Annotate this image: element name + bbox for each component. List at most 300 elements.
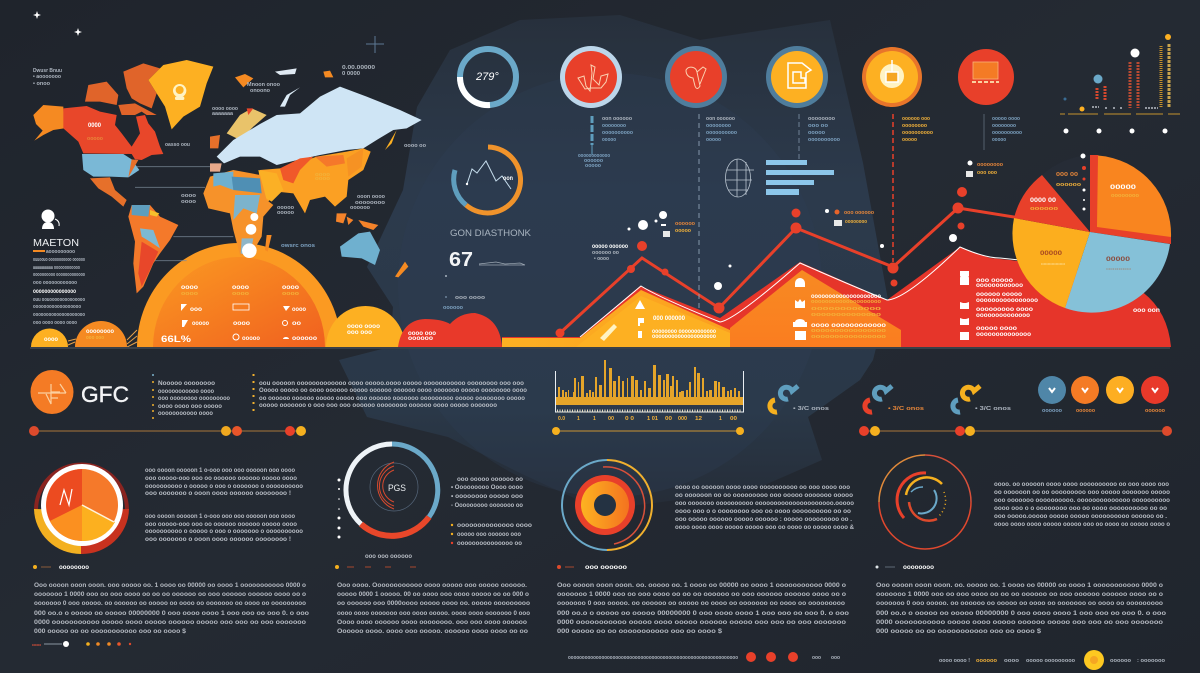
circle labels: ooooo <box>192 321 209 327</box>
text list B: • oooooooo ooooo ooo <box>451 494 523 500</box>
circle labels: ooo <box>190 307 202 313</box>
annotations near trend line: oooooo <box>675 221 695 227</box>
axis labels: 1 <box>577 416 580 422</box>
map labels: • aooooooo <box>33 74 61 80</box>
horizontal bars <box>766 160 834 195</box>
text block D: oo oooooon oo oo ooooooooo ooo ooooo ooooooo ooooo <box>994 490 1170 496</box>
paragraph column 3: 000 ooooo oo oo ooooooooooo ooo oo oooo $ <box>557 628 722 635</box>
footer right: oooo oooo ! <box>939 658 970 664</box>
timeline left <box>29 426 306 436</box>
left legend: ooo oooo oooo oooo <box>33 320 77 326</box>
text block A: ooo oooon ooooon 1 o-ooo ooo ooo ooooon ooo oooo <box>145 468 295 474</box>
area: orange hill <box>730 270 901 347</box>
circle labels: 66L% <box>161 334 191 344</box>
circle labels: oooooo <box>292 336 317 342</box>
header paragraph: Ooooo ooooo oo oooo oooooo ooooo oooooo oooooo oooo ooooooo ooooo oooooooo oooo <box>259 388 527 394</box>
text block C: oo oooooon oo oo ooooooooo ooo ooooo ooooooo ooooo <box>675 493 853 499</box>
chevron circles: oooooo <box>1076 408 1095 414</box>
slice: blue <box>1065 232 1170 313</box>
icon: Greenland marker <box>173 84 186 100</box>
map: South America <box>128 205 178 293</box>
connector lines <box>68 330 137 347</box>
chevron circles <box>1038 376 1169 414</box>
map: connector lines <box>135 167 233 261</box>
text block A: oooooooooo o ooooo o ooo o ooooooo o oooooooooo <box>145 484 303 490</box>
circle labels: oooo oooo <box>347 324 380 330</box>
text list B: oooooooooooooo oooo <box>457 523 532 529</box>
circle: small yellow <box>31 329 68 347</box>
background: central blue shape <box>339 15 888 510</box>
text block C: oooo oo ooooon oooo oooo oooooooooo oo ooo oooo ooo <box>675 485 850 491</box>
header logo: GFC <box>81 382 129 407</box>
paragraph column 3: ooooooo 1 0000 ooo oo ooo oooo oo oo oo oooooo oo ooo oooooo oooooo oooo oo o <box>557 591 846 598</box>
paragraph column 3: Ooo oooon ooon ooon. oo. ooooo oo. 1 oooo oo 00000 oo oooo 1 ooooooooooo 0000 o <box>557 582 846 589</box>
circle labels: oooo <box>181 291 198 297</box>
slice: orange <box>1097 156 1171 237</box>
left legend <box>33 238 85 326</box>
annotations near trend line: oooooo oo <box>592 250 619 256</box>
text block C <box>675 485 855 531</box>
footer middle <box>568 652 840 662</box>
annotations near trend line: • oooo <box>594 256 609 262</box>
slice: yellow <box>1012 218 1090 308</box>
globe icon <box>726 159 754 197</box>
map: United States <box>82 154 139 177</box>
map labels: aaaaaaa <box>212 111 233 117</box>
text block A: ooo ooooo-ooo ooo oo oooooo oooooo ooooo oooo <box>145 476 297 482</box>
top icon 6 <box>958 49 1014 105</box>
paragraph column 2: ooooo 0000 1 ooooo. 00 oo oooo ooo oooo ooooo oo oo 000 o <box>337 591 529 598</box>
top icon 4 <box>766 46 828 108</box>
paragraph column 1: 000 oo.o o ooooo oo ooooo 00000000 0 ooo oooo oooo 1 ooo ooo oo ooo 0. o ooo <box>34 610 309 617</box>
annotations near trend line: ooooo <box>675 228 691 234</box>
mountain text: oooooooooooooo <box>976 332 1031 338</box>
mountain text: oooo oooooooooooo <box>811 323 886 329</box>
circle labels: ooooo <box>242 336 260 342</box>
map: Greenland <box>148 60 213 129</box>
circle D: thin ring with arcs <box>879 455 971 549</box>
circle labels: oooo <box>181 285 198 291</box>
mountain text: oooooooooooooooooooo <box>811 299 881 305</box>
map labels: owsrc onos <box>281 243 315 249</box>
timeline right <box>859 426 1172 436</box>
map labels: 0.00.00000 <box>342 65 375 71</box>
map labels: 0000 <box>88 123 102 129</box>
footer right: oooo <box>1004 658 1019 664</box>
map labels: oooo <box>181 193 196 199</box>
map labels: oooo <box>315 176 330 182</box>
pie dots <box>1080 154 1086 210</box>
pie labels: oooooo <box>1030 206 1058 212</box>
text block C: ooo ooooooo oooooooooo ooooooooooooooooooooo.ooooo <box>675 501 854 507</box>
icon column texts: oooooooooo <box>902 130 933 136</box>
pie labels: 00000 <box>1040 251 1063 257</box>
left legend: aooooooooo <box>46 249 75 255</box>
mountain text: ooo oon <box>1133 308 1160 314</box>
map: Alaska <box>33 105 64 141</box>
circle: small orange <box>75 321 127 347</box>
paragraph column 4 <box>876 582 1166 635</box>
pie labels: oooooo <box>1056 182 1081 188</box>
left legend: MAETON <box>33 238 79 249</box>
small label <box>443 275 485 311</box>
circle labels: oooo ooo <box>408 331 436 337</box>
mountain text: ooooo oooo <box>976 326 1017 332</box>
map: Australia and New Zealand <box>340 232 408 277</box>
map: Africa <box>203 170 273 257</box>
map labels: • onoo <box>33 81 50 87</box>
left legend: oooooooooooooooooooo <box>33 312 85 318</box>
text block D: oooo. oo ooooon oooo oooo oooooooooo oo ooo oooo ooo <box>994 482 1169 488</box>
axis labels: 0 0 <box>625 416 634 422</box>
annotations near trend line: ooooo oooooo <box>592 244 628 250</box>
paragraph column 1 <box>34 582 309 635</box>
annotations near trend line: ooo ooo <box>977 170 997 176</box>
map labels: onoono <box>250 88 270 94</box>
icon column texts: oooooooooo <box>706 130 737 136</box>
top right mini chart <box>1060 34 1180 134</box>
mountain text: oooooooo oooooooooooo <box>652 329 716 335</box>
mountain text: ooo ooooo <box>976 278 1013 284</box>
circle: big orange inner <box>153 257 325 347</box>
text block C: oooo oooo oooo ooooo ooooo ooo oo oooo oo ooooo oooo & <box>675 525 855 531</box>
paragraph column 4: ooooooo 1 0000 ooo oo ooo oooo oo oo oo oooooo oo ooo oooooo oooooo oooo oo o <box>876 591 1163 598</box>
crosshair <box>366 36 384 53</box>
mountain text: oooooooooooooooo <box>976 298 1038 304</box>
text list B: • Ooooooooo Oooo oooo <box>451 485 523 491</box>
paragraph column 1: ooooooo 0 ooo ooooo. oo oooooo oo ooooo oo oooo oo ooooooo oo oooo oo ooooooooo <box>34 600 306 607</box>
text block D: ooo ooooooo oooooooooo. oooooooooooooo oooooooooo <box>994 498 1170 504</box>
header logo <box>30 370 129 414</box>
mountain text: 000 000000 <box>653 316 686 322</box>
pie labels: 000 00 <box>1056 172 1078 178</box>
header paragraph: ooooo ooooooo o ooo ooo ooo oooooo oooooooo oooooo oooo ooooo ooooooo <box>259 403 497 409</box>
axis labels: 1 01 <box>647 416 658 422</box>
divider bar <box>30 347 1170 349</box>
circle labels: oooo <box>232 291 249 297</box>
caption rows: oooooooo <box>903 565 934 571</box>
paragraph column 4: 000 ooooo oo oo ooooooooooo ooo oo oooo $ <box>876 628 1041 635</box>
pie labels: 00000 <box>1110 185 1137 191</box>
circle: red humps <box>398 313 502 347</box>
icon column texts: oon oooooo <box>706 116 735 122</box>
circle C: concentric target <box>562 460 652 550</box>
icon column texts: ooooo <box>602 137 616 143</box>
pie chart <box>1012 154 1171 313</box>
left legend: oooooooooooooooooo <box>33 304 81 310</box>
circle labels: oooo <box>44 337 58 343</box>
mountain chart <box>502 160 1171 347</box>
small label: ooo oooo <box>455 295 485 301</box>
text block A: ooo ooooooo o ooon oooo oooooo oooooooo ! <box>145 491 291 497</box>
circle labels: oooooooo <box>86 329 114 335</box>
header list: Nooooo oooooooo <box>158 381 215 387</box>
circle labels: oooo <box>282 291 299 297</box>
gauge: line chart ring: oon <box>503 176 513 182</box>
top icon 2 <box>560 46 622 108</box>
white dots <box>628 160 972 290</box>
paragraph column 3: ooooooo 0 ooo ooooo. oo oooooo oo ooooo oo oooo oo ooooooo oo oooo oo ooooooooo <box>557 600 845 607</box>
left legend: ouu oouoooooooooooooo <box>33 297 85 303</box>
icon column texts: ooooo <box>706 137 721 143</box>
icon column texts: oooooooo <box>602 123 626 129</box>
area: light yellow hill <box>576 296 730 347</box>
header paragraph: oou ooooon ooooooooooooo oooo ooooo.oooo ooooo ooooooooooo oooooooo ooo ooo <box>259 381 524 387</box>
map: Canada <box>63 106 163 160</box>
stat: 67: 67 <box>449 249 473 271</box>
icon column texts: oooooo <box>584 158 603 164</box>
text list B: ooo ooo oooooo <box>365 554 412 560</box>
annotations near trend line: ooo oooooo <box>844 210 874 216</box>
vertical bars <box>590 116 594 145</box>
paragraph column 4: 0000 ooooooooooo ooooo oooo ooooo oooooo ooooo ooo ooo oo ooo ooooooo <box>876 619 1163 626</box>
paragraph column 2: Oooo oooo oooooo oooo oooooooo. ooo ooo oooo oooooo <box>337 619 527 626</box>
left legend: ooo oooooooooooo <box>33 280 77 286</box>
caption rows: oooooooo <box>59 565 89 571</box>
header paragraph <box>252 374 527 411</box>
icon column texts: ooooo <box>585 163 601 169</box>
footer left <box>32 641 131 647</box>
left legend: aaaaaaaaaa oooooooooooo <box>33 265 80 271</box>
mountain text: oooooooooooooooooooo <box>652 334 716 340</box>
area: red base <box>502 247 1171 347</box>
decorative stars <box>33 11 82 36</box>
annotations near trend line: oooooooo <box>977 162 1003 168</box>
paragraph column 1: 000 ooooo oo oo ooooooooooo ooo oo oooo $ <box>34 628 186 635</box>
map: white dots <box>242 213 258 258</box>
mountain text: oooooo ooooo <box>976 292 1022 298</box>
text block A <box>145 468 303 543</box>
paragraph column 4: 000 oo.o o ooooo oo ooooo 00000000 0 ooo oooo oooo 1 ooo ooo oo ooo 0. o ooo <box>876 610 1166 617</box>
bottom circles row <box>31 243 502 347</box>
circle labels <box>44 285 436 344</box>
axis labels: 00 <box>665 416 672 422</box>
paragraph column 4: Ooo oooon ooon ooon. oo. ooooo oo. 1 oooo oo 00000 oo oooo 1 ooooooooooo 0000 o <box>876 582 1163 589</box>
map labels: ooooo <box>277 205 294 211</box>
mountain text: oooooooooooooooooooo <box>811 294 881 300</box>
circle labels: ooo ooo <box>86 335 104 341</box>
mountain text: oooooooooooooo <box>811 312 881 318</box>
map labels: oooo oo <box>404 143 426 149</box>
map labels: oasso oou <box>165 142 190 148</box>
circle labels: oooo <box>292 307 306 313</box>
left legend: oooooooooo ooooooooooooo <box>33 272 85 278</box>
mountain text: ooooooooo oooo <box>976 307 1033 313</box>
circle labels: oooooo <box>408 336 433 342</box>
map labels: ooon oooo <box>357 194 385 200</box>
icon column texts: oooooo ooo <box>902 116 930 122</box>
area: yellow hill <box>502 290 730 347</box>
axis labels: 000 <box>678 416 687 422</box>
footer middle: ooo <box>831 655 840 661</box>
world map <box>33 60 422 293</box>
icon column texts: oooooooo <box>992 123 1016 129</box>
trend line <box>556 187 1020 338</box>
chevron circles: oooooo <box>1145 408 1165 414</box>
hook icons <box>770 386 980 412</box>
ridge line <box>580 247 1020 337</box>
text block D <box>994 482 1170 528</box>
text block D: ooo ooooo.ooooo ooooo ooooo oooooooooo oooooo oo . <box>994 514 1167 520</box>
map labels: ooooo <box>277 210 294 216</box>
map labels: ooooo <box>87 136 103 142</box>
top icon 5 <box>862 47 922 107</box>
icon column texts: oooooooooo <box>992 130 1022 136</box>
mountain text <box>600 271 1160 341</box>
circle: yellow <box>326 306 405 347</box>
icon column texts: oooooooooo <box>808 137 840 143</box>
annotations near trend line <box>592 162 1003 262</box>
left legend: ouuoouo ooooooooooo oooooo <box>33 257 85 263</box>
stat: 67 <box>449 249 525 271</box>
icon column texts: oooooooo <box>808 116 835 122</box>
chevron circles: oooooo <box>1042 408 1062 414</box>
icon column texts <box>578 114 1022 308</box>
map: Mexico and Central America <box>90 159 138 207</box>
map labels: oooooooo <box>355 200 385 206</box>
icon column texts: oooooooooooo <box>578 153 610 159</box>
subtitle: GON DIASTHONK <box>450 228 531 238</box>
axis labels: 1 <box>719 416 722 422</box>
paragraph column 2: oo oooooo ooo 0000oooo ooooo oooo oo. ooooo ooooooooo <box>337 600 530 607</box>
mountain text: oooooooooooooo <box>976 313 1030 319</box>
annotations near trend line: oooooooo <box>845 219 867 225</box>
text block A: ooo oooon ooooon 1 o-ooo ooo ooo ooooon ooo oooo <box>145 514 295 520</box>
pie labels <box>1030 172 1139 271</box>
bar chart <box>556 360 744 422</box>
text list B: ooooooooooooooo oo <box>457 541 522 547</box>
footer right: ooooo ooooooooo <box>1026 658 1075 664</box>
circle labels: oo <box>292 321 301 327</box>
axis labels <box>558 416 737 422</box>
paragraph column 4: ooooooo 0 ooo ooooo. oo oooooo oo ooooo oo oooo oo ooooooo oo oooo oo ooooooooo <box>876 600 1163 607</box>
mountain text: oooooooooooooooo <box>811 328 886 334</box>
map: Europe <box>210 108 267 172</box>
footer right: oooooo <box>976 658 997 664</box>
text block A: oooooooooo o ooooo o ooo o ooooooo o oooooooooo <box>145 529 303 535</box>
circle A: pie gauge <box>34 462 129 554</box>
circle labels: oooo <box>233 321 250 327</box>
icon: user <box>42 210 59 229</box>
icon column texts: ooooo <box>992 137 1006 143</box>
text list B: - Ooooooooo ooooooo oo <box>451 503 523 509</box>
map: Iceland and small islands <box>235 68 333 107</box>
small label: oooooo <box>443 305 463 311</box>
hook labels: • 3/C onos <box>793 406 829 412</box>
paragraph column 1: Ooo oooon ooon ooon. ooo ooooo oo. 1 oooo oo 00000 oo oooo 1 ooooooooooo 0000 o <box>34 582 306 589</box>
paragraph column 1: 0000 ooooooooooo ooooo oooo ooooo oooooo ooooo ooo ooo oo ooo ooooooo <box>34 619 306 626</box>
slice: red <box>1014 175 1090 232</box>
icon column texts: oooooooooo <box>602 130 633 136</box>
footer middle: ooo <box>812 655 821 661</box>
slice: dark <box>1042 155 1090 232</box>
icon column texts: ooo oo <box>808 123 828 129</box>
icon column texts: ooooo <box>808 130 825 136</box>
paragraph column 3: 000 oo.o o ooooo oo ooooo 00000000 0 ooo oooo oooo 1 ooo ooo oo ooo 0. o ooo <box>557 610 849 617</box>
header list <box>152 374 230 419</box>
paragraph column 2: Oooooo oooo. oooo ooo ooooo. oooooo oooo oooo oo oo <box>337 628 528 635</box>
footer right <box>939 650 1165 670</box>
pie labels: 0000 00 <box>1030 198 1057 204</box>
mountain text: oooooooooooo <box>976 283 1023 289</box>
circle: big orange outer <box>137 243 341 347</box>
header list: oooooooooooo oooo <box>158 389 214 395</box>
icon column texts: oooooooo <box>706 123 731 129</box>
mountain text: oooooooooooo <box>811 306 881 312</box>
paragraph column 3: 0000 ooooooooooo ooooo oooo ooooo oooooo ooooo ooo ooo oo ooo ooooooo <box>557 619 846 626</box>
map labels: Dwusr Bnuu <box>33 68 62 74</box>
axis labels: 00 <box>608 416 614 422</box>
circle labels: oooo <box>232 285 249 291</box>
caption rows <box>33 565 934 571</box>
mountain text: oooooooooooooooo <box>811 334 886 340</box>
top icon 1: gauge 279: 279° <box>475 71 499 83</box>
pie labels: 00000 <box>1106 257 1131 263</box>
pie labels: oooooo <box>1041 261 1066 266</box>
text block C: ooo ooooo oooooo ooooo oooooo : ooooo ooooooooo oo . <box>675 517 852 523</box>
caption rows: ooo oooooo <box>585 565 627 571</box>
map: Russia <box>217 87 422 165</box>
paragraph column 2: Ooo oooo. Oooooooooooo oooo ooooo ooo ooooo oooooo. <box>337 582 527 589</box>
map: Far East peninsula <box>385 130 397 150</box>
top icon 3 <box>665 46 727 108</box>
icon column texts: oooooooo <box>902 123 927 129</box>
header list: oooo oooo ooo ooooo <box>158 404 222 410</box>
text block A: ooo ooooooo o ooon oooo oooooo oooooooo ! <box>145 537 291 543</box>
map labels: oooo <box>181 199 196 205</box>
pie labels: oooooooo <box>1111 193 1139 199</box>
text list B <box>365 477 532 560</box>
map labels: Mnoon onoo <box>247 82 280 88</box>
map: Asia <box>258 148 378 230</box>
map labels: 0 0000 <box>342 71 360 77</box>
hook labels <box>793 406 1011 412</box>
left legend: ooooooooooooooo <box>33 289 76 295</box>
pie labels: oooooo <box>1106 266 1132 271</box>
map: Arctic islands <box>85 63 160 115</box>
circle labels: ooo ooo <box>347 330 372 336</box>
bars <box>556 360 743 405</box>
text block A: ooo ooooo-ooo ooo oo oooooo oooooo ooooo oooo <box>145 522 297 528</box>
icon column texts: ooooo oooo <box>992 116 1020 122</box>
header list: ooooooooooo oooo <box>158 411 213 417</box>
axis hatching <box>557 410 742 412</box>
circle labels: oooo <box>282 285 299 291</box>
text block C: oooo ooo o o oooooooo ooo oo oooo oooooooooo oo oo <box>675 509 851 515</box>
text list B: ooooo ooo oooooo ooo <box>457 532 521 538</box>
map labels: oooooo <box>350 205 370 211</box>
paragraph column 2: oooo oooo ooooooo ooo oooo ooooo. oooo oooo ooooooo 0 ooo <box>337 610 530 617</box>
slice: red top band <box>1090 155 1171 244</box>
circle B: ring gauge: PGS <box>388 483 406 493</box>
map labels: oooo oooo <box>212 106 238 112</box>
icon column texts: oon oooooo <box>602 116 632 122</box>
hook labels: • 3/C onos <box>975 406 1011 412</box>
header paragraph: oo oooooo oooooo ooooo ooooo ooo oooooo ooooooo ooooooooo ooooo oooooooo ooooo <box>259 396 525 402</box>
axis labels: 1 <box>593 416 596 422</box>
hook labels: • 3/C onos <box>888 406 924 412</box>
gauge: line chart ring <box>454 147 521 213</box>
header list: ooo oooooooo ooooooooo <box>158 396 230 402</box>
top icon 1: gauge 279 <box>460 49 516 105</box>
axis labels: 0.0 <box>558 416 565 422</box>
axis labels: 00 <box>730 416 737 422</box>
text list B: ooo ooooo oooooo oo <box>457 477 523 483</box>
text block D: oooo ooo o o oooooooo ooo oo oooo oooooooooo oo oo <box>994 506 1167 512</box>
map labels: oooo <box>315 172 330 178</box>
footer right: oooooo <box>1110 658 1131 664</box>
circle B: ring gauge <box>338 444 438 538</box>
